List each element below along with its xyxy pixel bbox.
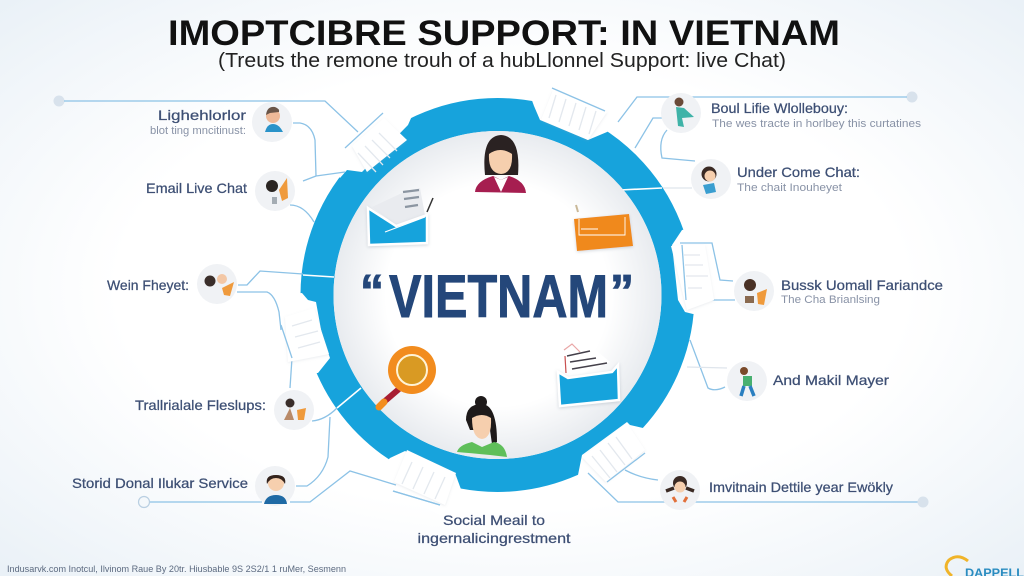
label group: trallrialale: Trallrialale Fleslups: — [135, 397, 266, 413]
icon: envelope top left — [368, 188, 433, 245]
footer source text: Indusarvk.com Inotcul, Ilvinom Raue By 20tr. Hiusbable 9S 2S2/1 1 ruMer, Sesmenn — [7, 564, 346, 575]
label: bottom centre: ingernalicingrestment — [418, 530, 571, 546]
tab: lower right — [582, 423, 645, 482]
centre disc — [334, 131, 662, 459]
tab: right — [671, 245, 714, 310]
label group: boul life — [661, 93, 922, 133]
icon: woman bottom — [457, 396, 507, 457]
label group: email live chat: Email Live Chat — [146, 180, 247, 196]
subtitle: (Treuts the remone trouh of a hubLlonnel Support: live Chat) — [218, 50, 786, 72]
avatar: man orange — [734, 271, 774, 311]
label group: left upper — [150, 102, 292, 142]
icon: orange box — [574, 205, 633, 251]
label group: imvitnain: Imvitnain Dettile year Ewökly — [709, 479, 893, 495]
label group: and makil — [727, 361, 889, 401]
label group: bussk: The Cha Brianlsing — [781, 294, 880, 306]
avatar: woman blue — [691, 159, 731, 199]
icon: woman top — [475, 135, 526, 193]
connector lines — [54, 92, 928, 508]
blue ring — [280, 85, 716, 515]
icon: envelope bottom right — [558, 344, 619, 406]
label group: storid — [72, 466, 295, 506]
label: bottom centre — [418, 512, 571, 546]
label group: boul life: The wes tracte in horlbey this curtatines — [712, 118, 922, 130]
label group: under come chat: Under Come Chat: — [737, 164, 860, 180]
avatar: man blue shirt — [252, 102, 292, 142]
avatar: people orange — [274, 390, 314, 430]
label group: under come chat: The chait Inouheyet — [737, 182, 842, 194]
label group: storid: Storid Donal Ilukar Service — [72, 475, 248, 491]
label group: and makil: And Makil Mayer — [773, 372, 889, 388]
avatar: woman orange — [255, 171, 295, 211]
central word VIETNAM: VIETNAM — [389, 263, 608, 330]
logo — [946, 557, 1024, 576]
avatar: boy — [255, 466, 295, 506]
label group: left upper: Lighehlorlor — [158, 107, 246, 123]
label group: bussk — [734, 271, 943, 311]
tab: left — [281, 308, 329, 362]
avatar: green figure — [661, 93, 701, 133]
central word VIETNAM: ” — [610, 265, 634, 317]
tab: lower left — [393, 450, 456, 505]
label group: under come chat — [691, 159, 860, 199]
icon: magnifier — [379, 346, 436, 407]
label group: boul life: Boul Lifie Wlollebouy: — [711, 100, 848, 116]
avatar: two people — [197, 264, 237, 304]
label group: email live chat — [146, 171, 295, 211]
avatar: girl pigtails — [660, 470, 700, 510]
label group: left upper: blot ting mncitinust: — [150, 125, 246, 137]
tab: upper left — [345, 113, 407, 172]
label group: imvitnain — [660, 470, 893, 510]
label group: trallrialale — [135, 390, 314, 430]
label group: wein fheyet: Wein Fheyet: — [107, 277, 189, 293]
title: IMOPTCIBRE SUPPORT: IN VIETNAM — [168, 14, 840, 53]
white gaps in ring — [280, 85, 716, 515]
tab: upper right — [541, 88, 607, 140]
label group: wein fheyet — [107, 264, 237, 304]
label group: bussk: Bussk Uomall Fariandce — [781, 277, 943, 293]
central word VIETNAM: “ — [360, 265, 384, 317]
label: bottom centre: Social Meail to — [443, 512, 545, 528]
avatar: standing figure — [727, 361, 767, 401]
